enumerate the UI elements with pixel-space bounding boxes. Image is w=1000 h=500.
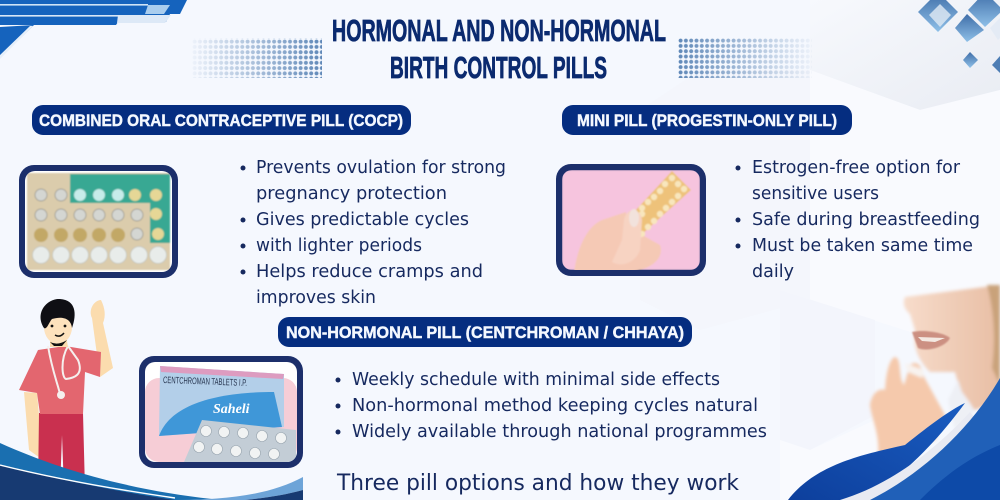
heading: combined pill: COMBINED ORAL CONTRACEPTIVE PILL (COCP) [39, 111, 403, 130]
heading: combined pill [32, 105, 411, 135]
bullet list: mini pill: Estrogen-free option for [752, 158, 961, 178]
bullet list: combined pill: pregnancy protection [256, 184, 447, 204]
footer caption: Three pill options and how they work [336, 471, 739, 496]
bullet list: combined pill [240, 158, 506, 308]
bottom-left swoosh [0, 443, 303, 500]
doctor illustration [19, 299, 113, 490]
image: centchroman box [139, 356, 303, 468]
heading: non-hormonal pill [278, 317, 692, 347]
image: centchroman box: Saheli [213, 402, 250, 417]
top-left corner ribbon [0, 0, 187, 59]
bullet list: non-hormonal pill: Non-hormonal method keeping cycles natural [352, 396, 758, 416]
title: HORMONAL AND NON-HORMONAL [332, 13, 666, 48]
bullet list: mini pill: daily [752, 262, 794, 282]
halftone dots right [678, 38, 812, 78]
bottom-right swoosh [788, 378, 1000, 500]
bullet list: combined pill: Prevents ovulation for strong [256, 158, 506, 178]
bullet list: combined pill: Helps reduce cramps and [256, 262, 483, 282]
image: centchroman box: CENTCHROMAN TABLETS I.P. [163, 375, 247, 389]
bullet list: mini pill: Safe during breastfeeding [752, 210, 980, 230]
title [332, 13, 666, 85]
bullet list: combined pill: with lighter periods [256, 236, 422, 256]
bullet list: combined pill: improves skin [256, 288, 376, 308]
image: mini pill in hand [556, 164, 706, 276]
heading: mini pill: MINI PILL (PROGESTIN-ONLY PILL) [577, 111, 837, 130]
bullet list: combined pill: Gives predictable cycles [256, 210, 469, 230]
bullet list: mini pill [736, 158, 980, 282]
image: COCP blister pack [19, 165, 178, 278]
bullet list: non-hormonal pill: Weekly schedule with minimal side effects [352, 370, 720, 390]
heading: non-hormonal pill: NON-HORMONAL PILL (CENTCHROMAN / CHHAYA) [286, 323, 684, 342]
bullet list: mini pill: Must be taken same time [752, 236, 973, 256]
top-right diamonds [918, 0, 1000, 73]
bullet list: non-hormonal pill: Widely available through national programmes [352, 422, 767, 442]
title: BIRTH CONTROL PILLS [390, 50, 607, 85]
bullet list: non-hormonal pill [336, 370, 767, 442]
bullet list: mini pill: sensitive users [752, 184, 879, 204]
woman taking pill photo [870, 285, 1000, 455]
heading: mini pill [562, 105, 852, 135]
halftone dots left [192, 38, 322, 78]
